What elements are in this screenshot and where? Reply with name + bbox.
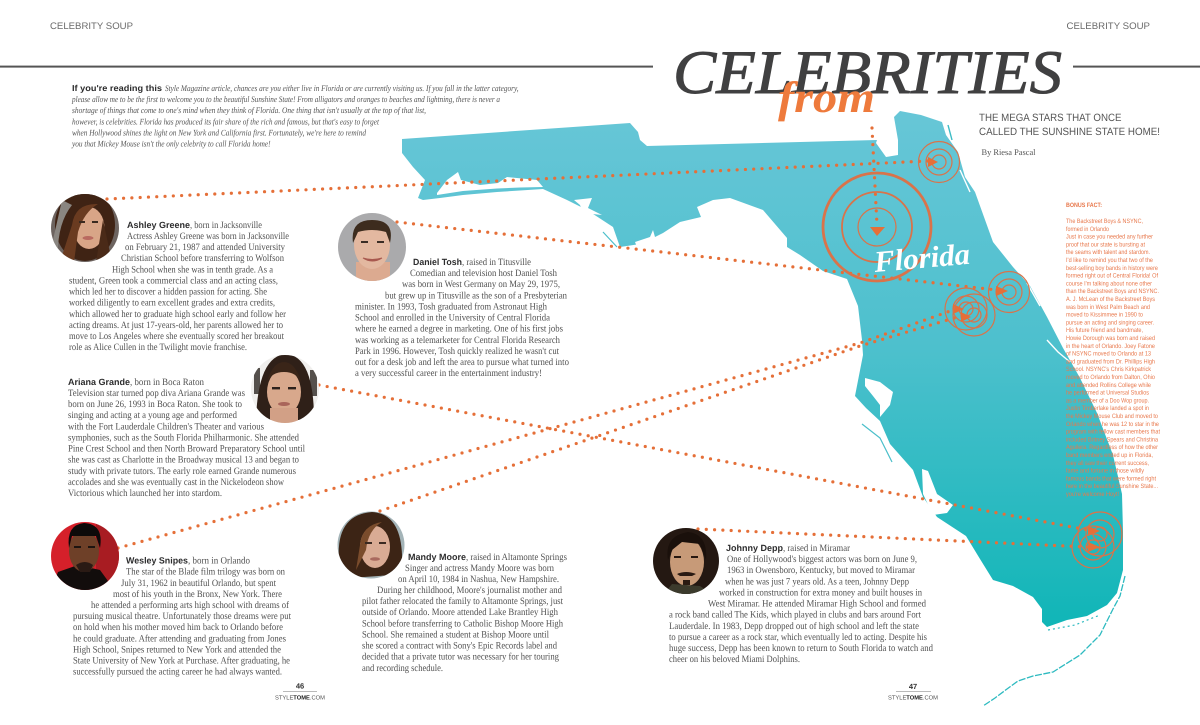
sidebar: bonus fact: His future friend and bandmate, [1066, 327, 1143, 334]
dotted line: Daniel Tosh to Titusville [397, 222, 997, 290]
bio: Daniel Tosh: but grew up in Titusville as the son of a Presbyterian [385, 290, 567, 302]
sidebar: bonus fact: moved to Orlando from Dalton, Ohio [1066, 374, 1155, 381]
bio: Mandy Moore: decided that a private tutor was necessary for her touring [362, 652, 559, 662]
intro paragraph: however, is celebrities. Florida has produced its fair share of the rich and famous, but that's easy to forget [72, 116, 380, 126]
rings: Jacksonville [918, 142, 960, 182]
bio: Mandy Moore: and recording schedule. [362, 663, 443, 674]
intro paragraph: If you're reading this [72, 83, 162, 93]
bio: Wesley Snipes: he attended a performing arts high school with dreams of [91, 600, 290, 611]
bio: Mandy Moore: Mandy Moore [408, 552, 466, 562]
bio: Johnny Depp: huge success, Depp has been known to return to South Florida to watch and [669, 643, 933, 654]
sidebar: bonus fact: was born in West Palm Beach and [1065, 304, 1150, 311]
sidebar: bonus fact: as a member of a Doo Wop group. [1066, 397, 1149, 404]
bio: Ashley Greene: on February 21, 1987 and attended University [125, 242, 285, 253]
intro paragraph: when Hollywood shines the light on New York and California first. Fortunately, we're here to remind [72, 128, 367, 138]
bio: Ariana Grande: study with private tutors. The early role earned Grande numerous [68, 466, 296, 477]
subtitle: THE MEGA STARS THAT ONCE [979, 112, 1122, 124]
bio: Johnny Depp: Lauderdale. In 1983, Depp dropped out of high school and left the state [669, 621, 919, 632]
bio: Wesley Snipes: State University of New York at Purchase. After graduating, he [73, 656, 290, 666]
bio: Mandy Moore: School before transferring to Catholic Bishop Moore High [362, 618, 563, 630]
bio: Johnny Depp: to pursue a career as a rock star, which eventually led to acting. Despite his [669, 632, 927, 643]
bio: Ashley Greene: Christian School before transferring to Wolfson [121, 253, 284, 264]
bio: Daniel Tosh: School and enrolled in the University of Central Florida [355, 312, 551, 324]
bio: Johnny Depp: 1963 in Owensboro, Kentucky, but moved to Miramar [727, 565, 916, 576]
footer: page 47: STYLETOME.COM [888, 694, 938, 702]
portrait: Daniel Tosh [337, 212, 407, 284]
bio: Ashley Greene: student, Green took a commercial class and an acting class, [69, 276, 278, 286]
bio: Ashley Greene: High School when she was in tenth grade. As a [112, 264, 274, 276]
sidebar: bonus fact: formed right out of Central Florida! Of [1066, 273, 1158, 280]
bio: Ariana Grande: Ariana Grande [68, 377, 130, 387]
bio: Daniel Tosh: minister. In 1993, Tosh graduated from Astronaut High [355, 302, 547, 312]
rings: Orlando [945, 288, 987, 330]
portrait: Wesley Snipes [50, 521, 120, 592]
sidebar: bonus fact: formed in Orlando [1066, 226, 1109, 233]
sidebar: bonus fact: fame and fortune in those wildly [1066, 468, 1145, 475]
bio: Mandy Moore: Singer and actress Mandy Moore was born [405, 563, 554, 574]
bio: Johnny Depp [669, 543, 933, 665]
bio: Mandy Moore: pilot father relocated the family to Altamonte Springs, just [362, 596, 563, 607]
bio: Ariana Grande: Victorious which launched her into stardom. [68, 488, 222, 499]
rings: Miramar [1072, 526, 1114, 568]
sidebar: bonus fact: the Mickey Mouse Club and moved to [1066, 413, 1158, 420]
sidebar: bonus fact: BONUS FACT: [1066, 202, 1102, 209]
bio: Daniel Tosh: Daniel Tosh [413, 257, 462, 267]
sidebar: bonus fact: pursue an acting and singing career. [1066, 319, 1154, 326]
bio: Daniel Tosh: Park in 1996. However, Tosh quickly realized he wasn't cut [355, 346, 559, 357]
bio: Daniel Tosh [355, 257, 569, 379]
dotted line: Mandy Moore to Altamonte Springs [380, 316, 961, 511]
bio: Johnny Depp: West Miramar. He attended Miramar High School and formed [708, 598, 926, 610]
sidebar: bonus fact: School. NSYNC's Chris Kirkpatrick [1066, 366, 1152, 373]
bio: Wesley Snipes: July 31, 1962 in beautiful Orlando, but spent [121, 578, 276, 589]
bio: Ashley Greene: , born in Jacksonville [190, 220, 262, 231]
rings: Altamonte Springs [953, 294, 995, 336]
bio: Mandy Moore: During her childhood, Moore's journalist mother and [377, 585, 562, 596]
subtitle [979, 112, 1160, 138]
bio: Mandy Moore: School. She remained a student at Bishop Moore until [362, 630, 549, 640]
bio: Ariana Grande: , born in Boca Raton [130, 377, 204, 388]
portrait: Ashley Greene [51, 194, 119, 262]
bio: Ashley Greene: move to Los Angeles where she eventually scored her breakout [69, 331, 284, 342]
footer: page 47 [888, 682, 938, 702]
sidebar: bonus fact: Orlando when he was 12 to star in the [1066, 421, 1159, 428]
bio: Ariana Grande: Pine Crest School and then North Broward Preparatory School until [68, 444, 305, 454]
title: CELEBRITIES: CELEBRITIES [673, 39, 1062, 107]
sidebar: bonus fact: moved to Kissimmee in 1990 to [1066, 312, 1143, 319]
intro paragraph [71, 83, 519, 148]
bio: Johnny Depp: a rock band called The Kids, which played in clubs and bars around Fort [669, 610, 921, 620]
bio: Wesley Snipes: The star of the Blade film trilogy was born on [126, 566, 285, 578]
sidebar: bonus fact: famous bands that were formed right [1066, 475, 1156, 482]
sidebar: bonus fact: you're welcome Hoyt! [1066, 491, 1119, 498]
bio: Wesley Snipes: High School, Snipes returned to New York and attended the [73, 644, 281, 656]
intro paragraph: shortage of things that come to one's mind when they think of Florida. One thing that isn't usually at the top of that list, [72, 105, 426, 115]
bio: Ariana Grande: Television star turned pop diva Ariana Grande was [68, 388, 245, 399]
bio: Ashley Greene: which allowed her to graduate high school early and follow her [69, 309, 287, 320]
portrait: Ariana Grande [250, 354, 320, 426]
bio: Daniel Tosh: out for a desk job and left the area to pursue what turned into [355, 357, 569, 368]
sidebar: bonus fact: course I'm talking about none other [1066, 280, 1152, 287]
bio: Ashley Greene [69, 220, 289, 353]
map label: Florida: Florida [872, 238, 971, 279]
bio: Ariana Grande [68, 377, 305, 499]
dotted line: Johnny Depp to Miramar [698, 529, 1088, 547]
sidebar: bonus fact: in the heart of Orlando. Joey Fatone [1066, 343, 1155, 350]
bio: Ashley Greene: worked diligently to earn excellent grades and extra credits, [69, 298, 275, 308]
bio: Johnny Depp: worked in construction for extra money and built houses in [719, 588, 922, 598]
bio: Ariana Grande: she was cast as Charlotte in the Broadway musical 13 and began to [68, 454, 299, 466]
sidebar: bonus fact [1065, 202, 1160, 498]
bio: Mandy Moore: outside of Orlando. Moore attended Lake Brantley High [362, 607, 558, 618]
section label: right page: CELEBRITY SOUP [1066, 21, 1150, 32]
sidebar: bonus fact: I'd like to remind you that two of the [1066, 257, 1153, 264]
bio: Ariana Grande: with the Fort Lauderdale Children's Theater and various [68, 422, 264, 432]
sidebar: bonus fact: Just in case you needed any further [1066, 234, 1153, 241]
sidebar: bonus fact: Justin Timberlake landed a spot in [1066, 405, 1149, 412]
bio: Ariana Grande: born on June 26, 1993 in Boca Raton. She took to [68, 399, 242, 410]
bio: Daniel Tosh: was born in West Germany on May 29, 1975, [402, 279, 560, 290]
bio: Daniel Tosh: was working as a telemarketer for Central Florida Research [355, 335, 560, 346]
bio: Johnny Depp: Johnny Depp [726, 543, 783, 553]
sidebar: bonus fact: the seams with talent and stardom. [1066, 249, 1150, 256]
rings: central Florida [823, 173, 931, 281]
bio: Ariana Grande: singing and acting at a young age and performed [68, 410, 237, 421]
dotted line: Ashley Greene to Jacksonville [107, 161, 928, 199]
bio: Ariana Grande: accolades and she was eventually cast in the Nickelodeon show [68, 477, 284, 488]
map of Florida [402, 111, 1125, 706]
section label: left page: CELEBRITY SOUP [50, 21, 133, 32]
bio: Ariana Grande: symphonies, such as the South Florida Philharmonic. She attended [68, 432, 299, 444]
sidebar: bonus fact: program with fellow cast members that [1066, 429, 1160, 436]
bio: Mandy Moore [362, 552, 567, 674]
intro paragraph: please allow me to be the first to welcome you to the beautiful Sunshine State! From alligators and oranges to beaches and lightning, there is never a [71, 94, 500, 104]
byline: By Riesa Pascal [982, 147, 1036, 157]
sidebar: bonus fact: of NSYNC moved to Orlando at 13 [1066, 351, 1151, 358]
bio: Wesley Snipes: on hold when his mother moved him back to Orlando before [73, 622, 283, 633]
dotted line: Ariana Grande to Boca Raton [319, 385, 1088, 530]
sidebar: bonus fact: than the Backstreet Boys and NSYNC. [1066, 288, 1159, 295]
sidebar: bonus fact: and graduated from Dr. Phillips High [1066, 358, 1155, 365]
sidebar: bonus fact: they all saw their current success, [1066, 460, 1149, 467]
sidebar: bonus fact: best-selling boy bands in history were [1066, 265, 1158, 272]
intro paragraph: Style Magazine article, chances are you either live in Florida or are currently visiting us. If you fall in the latter category, [165, 83, 519, 93]
title: from: from [778, 73, 875, 122]
bio: Johnny Depp: One of Hollywood's biggest actors was born on June 9, [727, 554, 917, 565]
bio: Johnny Depp: cheer on his beloved Miami Dolphins. [669, 654, 800, 665]
sidebar: bonus fact: A. J. McLean of the Backstreet Boys [1066, 296, 1155, 303]
bio: Wesley Snipes: Wesley Snipes [126, 556, 188, 566]
footer: page 46 [275, 682, 325, 702]
portrait: Johnny Depp [653, 528, 719, 594]
sidebar: bonus fact: he performed at Universal Studios [1066, 390, 1149, 397]
bio: Daniel Tosh: a very successful career in the entertainment industry! [355, 368, 542, 379]
footer: page 46: 46 [296, 682, 304, 691]
sidebar: bonus fact: Howie Dorough was born and raised [1066, 335, 1155, 342]
footer: page 47: 47 [909, 682, 917, 691]
sidebar: bonus fact: and attended Rollins College while [1066, 382, 1151, 389]
bio: Ashley Greene: which led her to discover a hidden passion for acting. She [69, 286, 267, 298]
portrait: Mandy Moore [337, 511, 405, 579]
bio: Ashley Greene: Ashley Greene [127, 220, 190, 230]
sidebar: bonus fact: Aguilera. Regardless of how the other [1066, 444, 1158, 451]
sidebar: bonus fact: here in the beautiful Sunshine State... [1066, 483, 1158, 490]
bio: Wesley Snipes: most of his youth in the Bronx, New York. There [113, 589, 282, 600]
bio: Wesley Snipes: he could graduate. After attending and graduating from Jones [73, 634, 286, 644]
footer: page 46: STYLETOME.COM [275, 694, 325, 702]
bio: Wesley Snipes: pursuing musical theatre. Unfortunately those dreams were put [73, 611, 291, 622]
bio: Johnny Depp: , raised in Miramar [783, 543, 851, 554]
bio: Johnny Depp: when he was just 7 years old. As a teen, Johnny Depp [725, 576, 909, 588]
sidebar: bonus fact: included Britney Spears and Christina [1066, 436, 1158, 443]
dotted line: from title to centre rings [872, 128, 877, 225]
rings: Boca Raton [1078, 512, 1122, 556]
subtitle: CALLED THE SUNSHINE STATE HOME! [979, 126, 1160, 138]
dotted line: Wesley Snipes to Orlando [118, 310, 953, 548]
sidebar: bonus fact: The Backstreet Boys & NSYNC, [1066, 218, 1143, 225]
sidebar: bonus fact: band members ended up in Florida, [1066, 452, 1153, 459]
bio: Mandy Moore: , raised in Altamonte Springs [466, 552, 567, 563]
bio: Mandy Moore: she scored a contract with Sony's Epic Records label and [362, 640, 557, 652]
intro paragraph: you that Mickey Mouse isn't the only celebrity to call Florida home! [71, 138, 271, 148]
bio: Wesley Snipes [73, 556, 291, 678]
bio: Daniel Tosh: where he earned a degree in marketing. One of his first jobs [355, 324, 563, 334]
bio: Mandy Moore: on April 10, 1984 in Nashua, New Hampshire. [398, 574, 559, 585]
rings: Titusville [988, 272, 1030, 312]
sidebar: bonus fact: proof that our state is bursting at [1066, 241, 1145, 248]
bio: Wesley Snipes: , born in Orlando [188, 556, 250, 566]
bio: Daniel Tosh: , raised in Titusville [462, 257, 531, 268]
bio: Wesley Snipes: successfully pursued the acting career he had always wanted. [73, 666, 282, 678]
bio: Daniel Tosh: Comedian and television host Daniel Tosh [410, 268, 557, 279]
bio: Ashley Greene: acting dreams. At just 17-years-old, her parents allowed her to [69, 320, 283, 331]
bio: Ashley Greene: role as Alice Cullen in the Twilight movie franchise. [69, 342, 247, 353]
bio: Ashley Greene: Actress Ashley Greene was born in Jacksonville [127, 231, 289, 242]
